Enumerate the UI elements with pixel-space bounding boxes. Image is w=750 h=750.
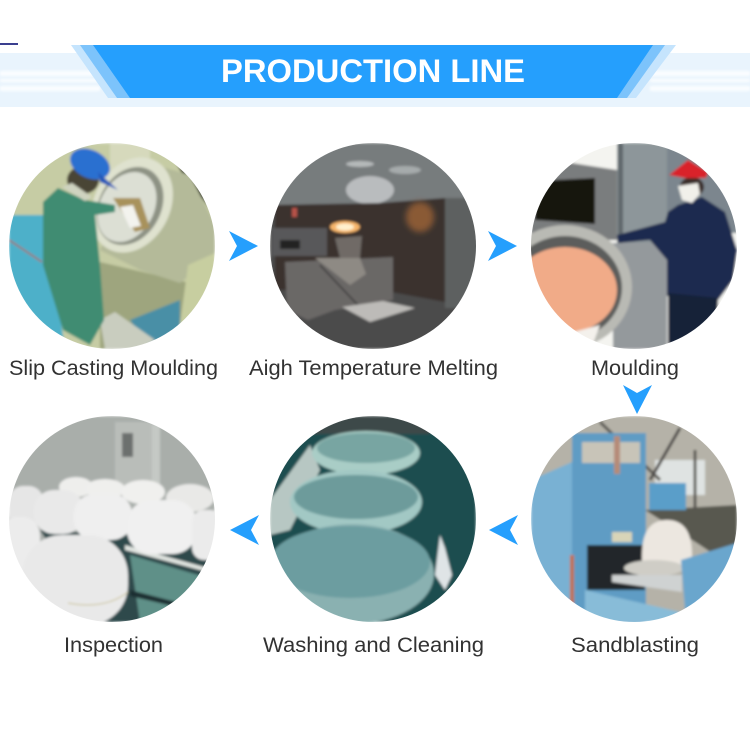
arrow 3 [623,385,652,414]
label: moulding: Moulding [591,357,679,380]
photo: slip casting moulding [9,142,215,349]
label: high temperature melting: Aigh Temperature Melting [249,357,498,380]
photo: moulding [531,143,737,349]
banner title: PRODUCTION LINE [221,53,525,89]
arrow 1 [229,231,258,261]
arrow 6 [230,515,259,545]
photo: washing and cleaning [270,416,476,624]
photo: inspection [0,416,222,625]
arrow 2 [488,231,517,261]
label: inspection: Inspection [64,634,163,657]
arrow 5 [489,515,518,545]
label: slip casting moulding: Slip Casting Moulding [9,357,218,380]
photo: high temperature melting [270,143,480,349]
banner [0,45,750,107]
label: sandblasting: Sandblasting [571,634,699,657]
photo: sandblasting [531,416,737,623]
label: washing and cleaning: Washing and Cleaning [263,634,484,657]
corner mark [0,43,18,45]
